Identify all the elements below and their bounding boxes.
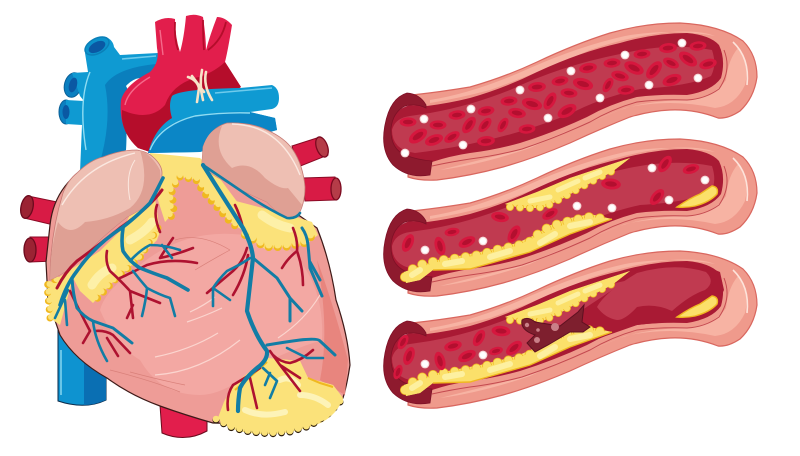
vessel: descending aorta bbox=[160, 405, 207, 438]
plaque: right small bbox=[677, 296, 717, 317]
left atrium bbox=[50, 150, 162, 280]
white blood cells bbox=[421, 351, 487, 368]
artery 2: plaque buildup bbox=[384, 139, 757, 296]
vessel: superior vena cava bbox=[59, 33, 158, 172]
red blood cells bbox=[400, 41, 718, 148]
plaque: bottom bbox=[404, 214, 612, 283]
open lumen bbox=[570, 264, 724, 338]
blood clot bbox=[522, 305, 590, 352]
vessel stubs: left pulmonary bbox=[19, 195, 62, 262]
plaque: bottom bbox=[404, 327, 612, 396]
lumen highlight bbox=[597, 267, 711, 320]
vessel: pulmonary artery bbox=[148, 85, 279, 153]
fat: left band bbox=[47, 198, 160, 325]
vessel: aorta bbox=[121, 15, 241, 152]
white blood cells bbox=[401, 39, 702, 157]
artery 3: blocked with clot bbox=[384, 251, 757, 408]
plaque: top bbox=[505, 158, 630, 208]
fat: lower apex bbox=[216, 358, 343, 434]
plaque: top bbox=[505, 271, 630, 321]
coronary arteries: red bbox=[57, 190, 313, 410]
artery 1: healthy bbox=[384, 23, 757, 180]
coronary veins: blue bbox=[55, 165, 335, 411]
red blood cells bbox=[399, 153, 700, 256]
fat: center bbox=[150, 153, 247, 232]
right atrium bbox=[202, 123, 305, 218]
white blood cells bbox=[421, 164, 709, 254]
vessel stubs: right pulmonary bbox=[292, 135, 341, 201]
plaque: right small bbox=[677, 186, 717, 207]
fat: right band bbox=[232, 200, 318, 249]
heart bbox=[19, 15, 350, 438]
vessel: inferior vena cava bbox=[58, 325, 106, 405]
ventricle muscle bbox=[46, 160, 350, 425]
red blood cells bbox=[392, 325, 525, 380]
ligament bbox=[188, 70, 212, 102]
